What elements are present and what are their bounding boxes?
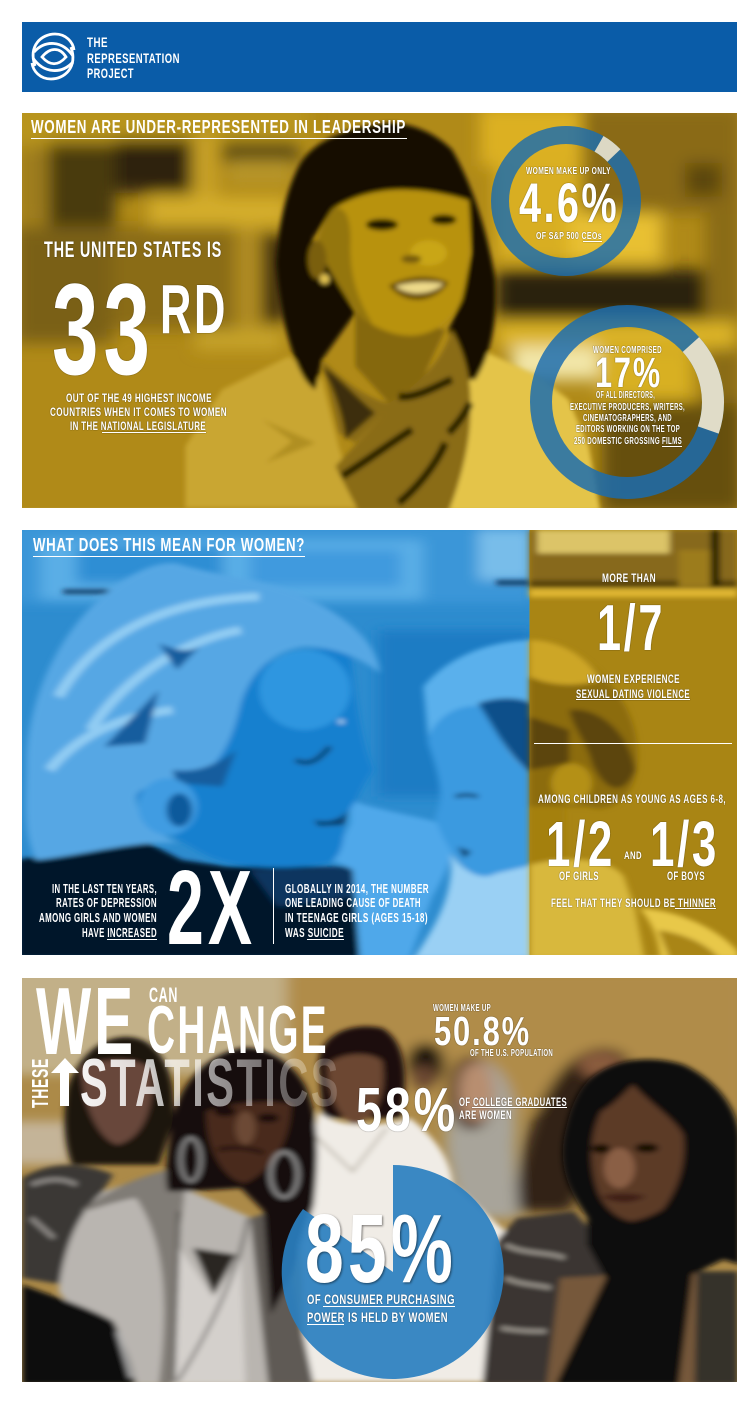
icon: up arrow	[51, 1058, 79, 1106]
pie chart: 85% purchasing power	[282, 1165, 504, 1379]
pie text	[305, 1194, 457, 1325]
stat: 33rd: OUT OF THE 49 HIGHEST INCOME	[66, 391, 212, 405]
face	[206, 1102, 291, 1183]
neck	[355, 313, 445, 403]
stat: body image in children: 1/2	[546, 808, 615, 880]
stat: 33rd: 33	[52, 256, 155, 402]
hair of foreground left woman	[166, 1048, 317, 1315]
stat: 1/7 dating violence: 1/7	[597, 591, 665, 664]
stat: 2x depression: HAVE INCREASED	[82, 926, 157, 940]
woman behind, gray top	[446, 1058, 519, 1218]
stat text: WOMEN MAKE UP ONLY	[526, 165, 611, 177]
baby sweater	[530, 859, 644, 958]
jacket	[185, 356, 359, 508]
stat: 50.8% of population: 50.8%	[434, 1008, 531, 1054]
organisation name: PROJECT	[87, 65, 134, 81]
pie text: OF CONSUMER PURCHASING	[307, 1291, 455, 1307]
stat: 33rd: COUNTRIES WHEN IT COMES TO WOMEN	[50, 405, 227, 419]
stat text: 17%	[595, 349, 662, 397]
stat: body image in children	[538, 792, 726, 910]
back left woman	[65, 1037, 174, 1165]
organisation name: REPRESENTATION	[87, 50, 180, 66]
ear	[138, 778, 198, 835]
heading: we can change these statistics: THESE	[27, 1058, 53, 1108]
header banner	[22, 22, 737, 92]
heading: we can change these statistics: CHANGE	[147, 992, 329, 1068]
stat: 1/7 dating violence: SEXUAL DATING VIOLENCE	[576, 687, 690, 701]
dark clothes	[17, 837, 362, 958]
stat: 2x depression: AMONG GIRLS AND WOMEN	[39, 911, 157, 925]
stat: 1/7 dating violence	[576, 571, 690, 701]
stat: 2x depression: WAS SUICIDE	[285, 926, 344, 940]
face	[318, 190, 470, 336]
face	[591, 1085, 684, 1222]
donut chart: 17% film	[541, 316, 713, 488]
stat: 1/7 dating violence: MORE THAN	[602, 571, 656, 585]
panel: we can change	[8, 968, 742, 1385]
stat text: OF ALL DIRECTORS,	[596, 390, 655, 401]
heading: we can change these statistics	[27, 968, 341, 1121]
photo: group of young women	[8, 968, 742, 1385]
stat: 33rd: IN THE NATIONAL LEGISLATURE	[70, 419, 206, 433]
stat: 2x depression: RATES OF DEPRESSION	[56, 896, 157, 910]
stat: 2x depression: GLOBALLY IN 2014, THE NUMBER	[285, 882, 429, 896]
stat: 58% of college graduates: 58%	[356, 1076, 458, 1145]
arm	[332, 800, 452, 958]
ear	[308, 240, 326, 279]
back right woman	[514, 1048, 633, 1211]
pie text: 85%	[305, 1194, 457, 1303]
scarf	[322, 330, 471, 511]
stat: body image in children: OF BOYS	[667, 869, 705, 883]
black scarf	[556, 1198, 740, 1385]
stat: 58% of college graduates	[356, 1076, 567, 1145]
stat: body image in children: AND	[624, 850, 642, 862]
hair	[563, 1059, 740, 1265]
baby hair	[524, 673, 640, 810]
stat: 58% of college graduates: ARE WOMEN	[459, 1108, 512, 1122]
heading: we can change these statistics: CAN	[149, 984, 178, 1007]
stat: 33rd: THE UNITED STATES IS	[44, 237, 222, 262]
baby head	[426, 704, 530, 878]
stat text: OF S&P 500 CEOs	[536, 230, 602, 242]
stat text: 4.6%	[519, 171, 619, 234]
stat: 2x depression: ONE LEADING CAUSE OF DEATH	[285, 896, 421, 910]
pie text: POWER IS HELD BY WOMEN	[307, 1309, 448, 1325]
heading: we can change these statistics: WE	[36, 968, 136, 1075]
stat: 33rd: RD	[160, 270, 228, 348]
stat text: EDITORS WORKING ON THE TOP	[576, 424, 680, 435]
hair	[276, 123, 496, 390]
panel: leadership	[9, 100, 742, 513]
heading: we can change these statistics: STATISTICS	[80, 1045, 341, 1121]
stat: 1/7 dating violence: WOMEN EXPERIENCE	[587, 672, 680, 686]
organisation name: THE	[87, 34, 108, 50]
stat: 33rd	[44, 237, 228, 433]
stat text	[519, 165, 619, 242]
stat: 2x depression: IN THE LAST TEN YEARS,	[52, 882, 157, 896]
white shirt	[300, 1111, 505, 1382]
heading: WHAT DOES THIS MEAN FOR WOMEN?	[33, 535, 305, 555]
donut chart: 4.6% CEOs	[500, 135, 632, 267]
stat: body image in children: OF GIRLS	[559, 869, 599, 883]
chair	[640, 908, 738, 958]
stat: 2x depression: IN TEENAGE GIRLS (AGES 15-18)	[285, 911, 428, 925]
stat: 50.8% of population: OF THE U.S. POPULATION	[470, 1048, 553, 1059]
face	[176, 650, 375, 872]
photo: mother and baby in blue duotone	[13, 523, 533, 958]
icon: representation project logo	[32, 34, 74, 79]
stat: 58% of college graduates: OF COLLEGE GRADUATES	[459, 1095, 567, 1109]
stat text: WOMEN COMPRISED	[593, 345, 662, 356]
stat text	[570, 345, 685, 447]
panel: what this means	[13, 523, 738, 967]
stat: 2x depression	[39, 868, 428, 944]
heading: WOMEN ARE UNDER-REPRESENTED IN LEADERSHIP	[31, 117, 406, 137]
stat: 2x depression: 2X	[167, 849, 256, 967]
stat text: CINEMATOGRAPHERS, AND	[583, 413, 672, 424]
eyes and mouth	[366, 219, 398, 230]
shirt of foreground left woman	[51, 1165, 273, 1382]
panel: gold overlay	[530, 530, 738, 958]
stat: 50.8% of population: WOMEN MAKE UP	[433, 1003, 491, 1014]
hair	[26, 563, 380, 860]
organisation name	[87, 34, 180, 81]
foreground right woman jacket	[483, 1211, 610, 1385]
black jacket on lap	[22, 1285, 136, 1385]
photo: young woman in gold duotone	[9, 100, 742, 513]
baby sweater	[414, 853, 533, 958]
blouse	[546, 1271, 697, 1385]
middle woman	[318, 1026, 405, 1118]
stat: body image in children: 1/3	[650, 808, 719, 880]
stat text: 250 DOMESTIC GROSSING FILMS	[574, 436, 682, 447]
